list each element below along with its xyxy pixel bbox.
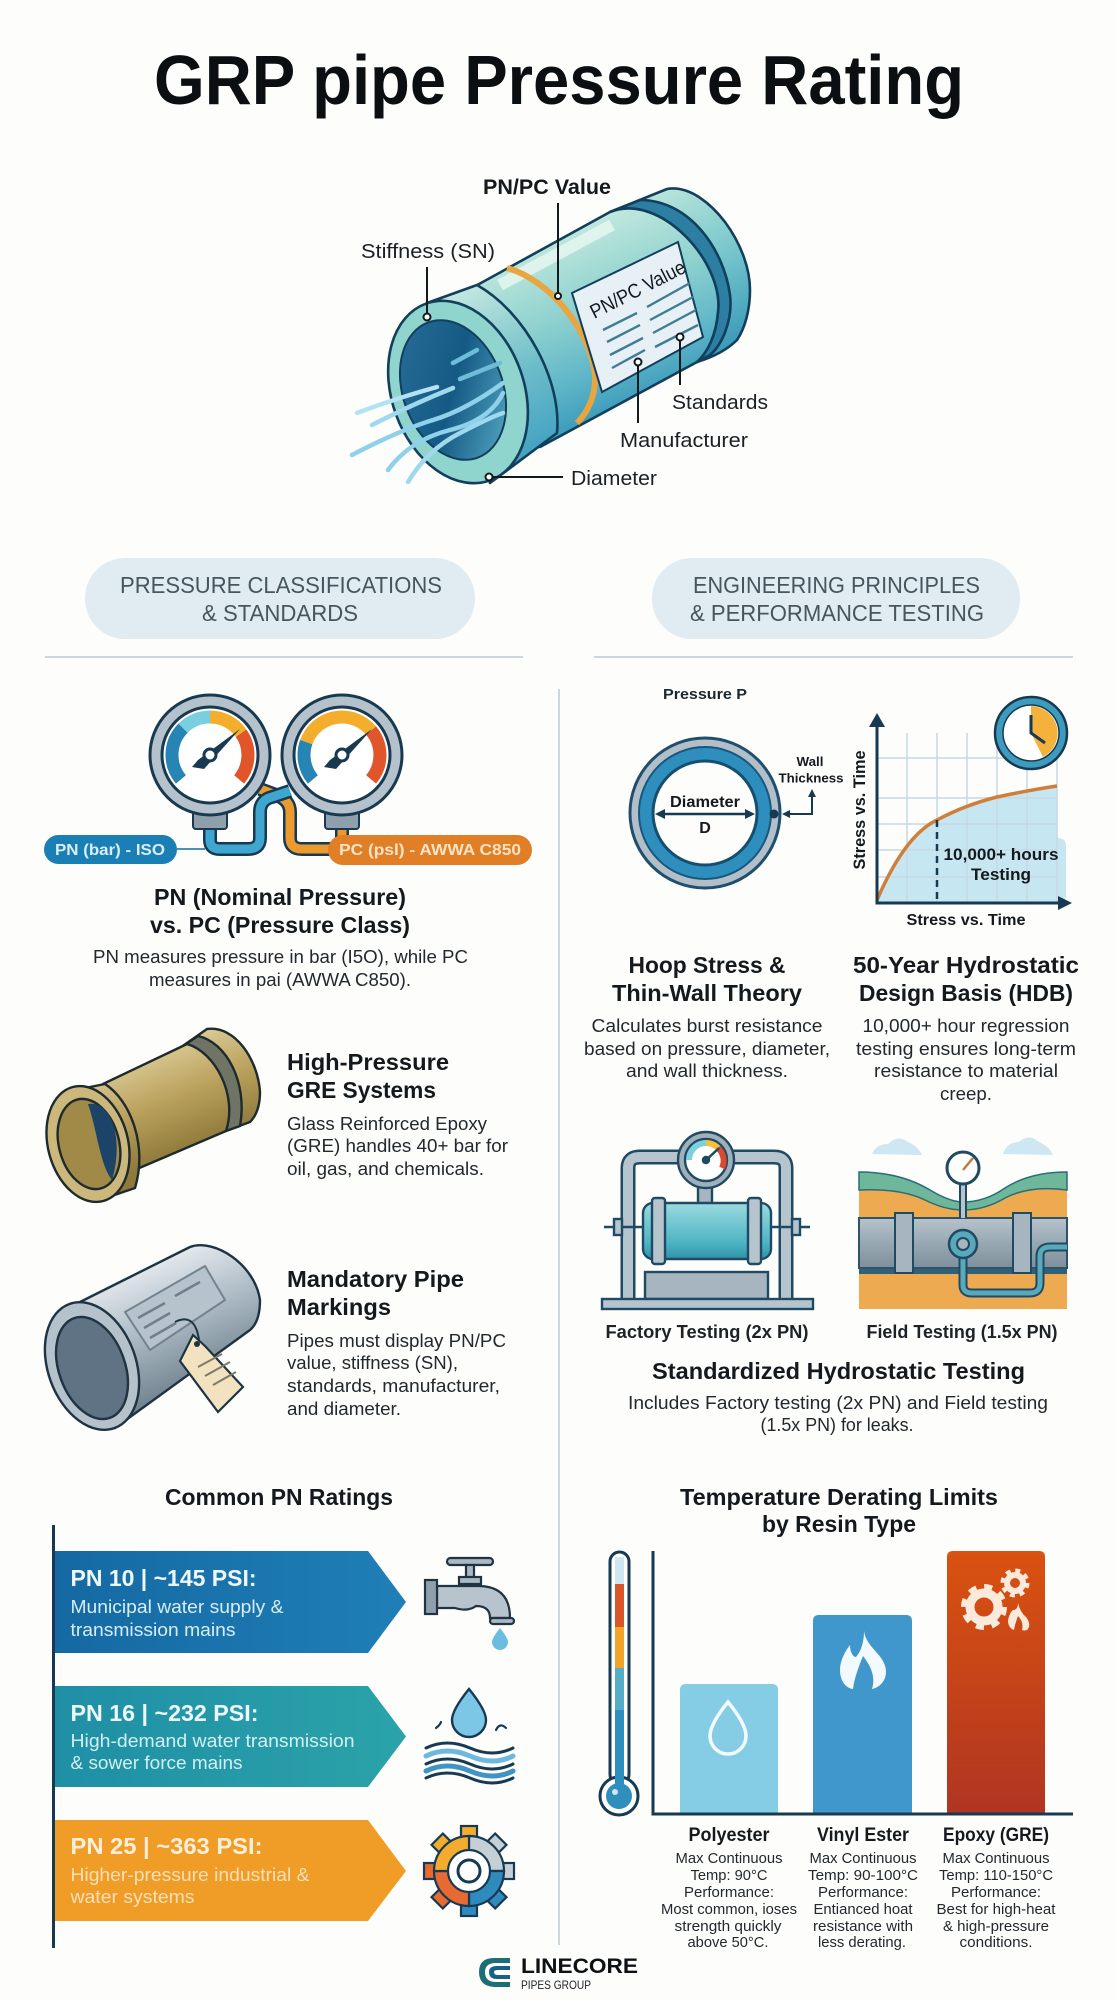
logo: Linecore Pipes Group: PIPES GROUP [521, 1978, 591, 1992]
data label on pipe: PN/PC Value [587, 257, 689, 323]
column text: polyester: strength quickly [674, 1919, 782, 1935]
arrow: PN 16: & sower force mains [70, 1753, 242, 1773]
heading: GRE: High-Pressure [287, 1049, 449, 1075]
text: GRE description: Glass Reinforced Epoxy [287, 1114, 487, 1134]
heading: hoop stress [612, 952, 802, 1006]
column text: vinyl ester: Vinyl Ester [817, 1825, 910, 1846]
arrow: PN 10 [55, 1551, 406, 1653]
text: PN vs PC description: PN measures pressure in bar (I5O), while PC [93, 947, 468, 967]
text: markings description: Pipes must display PN/PC [287, 1331, 506, 1351]
heading: HDB: 50-Year Hydrostatic [853, 952, 1079, 978]
gauge: PC [282, 695, 402, 829]
bar: epoxy [947, 1551, 1045, 1813]
column text: polyester [661, 1825, 797, 1951]
column text: vinyl ester: Temp: 90-100°C [808, 1868, 918, 1884]
captions: test types: Field Testing (1.5x PN) [866, 1322, 1058, 1342]
heading: GRE [287, 1049, 449, 1103]
chart: stress vs time: Stress vs. Time [906, 912, 1026, 929]
callout labels: Manufacturer [620, 430, 748, 452]
text: HDB description [856, 1016, 1076, 1104]
text: markings description [287, 1331, 506, 1419]
heading: common PN ratings: Common PN Ratings [165, 1484, 393, 1510]
section header: pressure classifications: & STANDARDS [202, 600, 358, 626]
column text: polyester: Temp: 90°C [690, 1868, 768, 1884]
pipe body [364, 188, 750, 503]
logo: Linecore Pipes Group [479, 1955, 638, 1992]
diagram: hoop stress ring [630, 686, 844, 888]
diagram: hoop stress ring: Thickness [778, 770, 844, 786]
diagram: hoop stress ring: Pressure P [663, 686, 747, 703]
panel: PN vs PC gauges [44, 695, 532, 865]
column text: polyester: Most common, ioses [661, 1902, 797, 1918]
section header: pressure classifications [85, 558, 475, 639]
text: standardized testing description: (1.5x PN) for leaks. [760, 1415, 914, 1435]
arrow: PN 10: transmission mains [70, 1620, 236, 1640]
section header: engineering principles: & PERFORMANCE TESTING [690, 600, 984, 626]
text: PN vs PC description: measures in pai (AWWA C850). [149, 970, 411, 990]
callout labels: Standards [672, 392, 768, 414]
callouts [424, 203, 684, 480]
text: markings description: and diameter. [287, 1399, 401, 1419]
gauge: PN [150, 695, 270, 829]
data label on pipe [572, 242, 703, 392]
text: markings description: value, stiffness (SN), [287, 1353, 458, 1373]
title: GRP pipe Pressure Rating [154, 41, 964, 119]
column text: epoxy: Temp: 110-150°C [939, 1868, 1053, 1884]
section header: engineering principles: ENGINEERING PRINCIPLES [693, 572, 980, 598]
pill: PC psi [328, 835, 532, 865]
text: HDB description: resistance to material [874, 1061, 1058, 1081]
column text: polyester: Polyester [688, 1825, 770, 1846]
arrow: PN 16: PN 16 | ~232 PSI: [70, 1700, 258, 1726]
column text: polyester: Performance: [684, 1885, 774, 1901]
gauge on rig [678, 1132, 734, 1188]
heading: hoop stress: Hoop Stress & [628, 952, 786, 978]
heading: standardized testing: Standardized Hydrostatic Testing [652, 1358, 1025, 1384]
text: hoop stress description: and wall thickness. [626, 1061, 788, 1081]
chart: stress vs time: 10,000+ hours [944, 846, 1058, 864]
column text: epoxy: Max Continuous [942, 1851, 1050, 1867]
text: markings description: standards, manufacturer, [287, 1376, 500, 1396]
text: hoop stress description [584, 1016, 830, 1081]
hero illustration: labelled pipe [352, 176, 768, 503]
section header: engineering principles [652, 558, 1020, 639]
column text: epoxy: Epoxy (GRE) [943, 1825, 1049, 1846]
bar: polyester [680, 1684, 778, 1813]
text: hoop stress description: Calculates burst resistance [592, 1016, 822, 1036]
heading: temperature derating [680, 1484, 998, 1537]
heading: markings: Markings [287, 1294, 391, 1320]
heading: HDB: Design Basis (HDB) [859, 980, 1073, 1006]
column text: epoxy: conditions. [960, 1935, 1032, 1951]
diagram: hoop stress ring: D [699, 820, 711, 837]
column text: epoxy [936, 1825, 1056, 1951]
callout labels: Stiffness (SN) [361, 241, 495, 263]
text: HDB description: creep. [940, 1084, 992, 1104]
arrow: PN 25 [55, 1820, 406, 1921]
icon: clock [995, 697, 1067, 769]
column text: polyester: Max Continuous [676, 1851, 782, 1867]
captions: test types: Factory Testing (2x PN) [606, 1322, 808, 1342]
text: HDB description: testing ensures long-term [856, 1039, 1076, 1059]
callout labels: Diameter [571, 468, 657, 490]
heading: hoop stress: Thin-Wall Theory [612, 980, 802, 1006]
illustration: field test buried pipe [859, 1138, 1067, 1309]
arrow: PN 25: Higher-pressure industrial & [70, 1865, 310, 1885]
heading: markings [287, 1266, 464, 1320]
column text: epoxy: Best for high-heat [936, 1902, 1056, 1918]
arrow: PN 25: water systems [69, 1887, 194, 1907]
arrow: PN 25: PN 25 | ~363 PSI: [70, 1833, 262, 1859]
text: hoop stress description: based on pressure, diameter, [584, 1039, 830, 1059]
text: GRE description: oil, gas, and chemicals. [287, 1159, 484, 1179]
callout labels: PN/PC Value [483, 176, 611, 199]
bar: vinyl ester [813, 1615, 912, 1813]
callout labels [361, 176, 768, 490]
column text: epoxy: & high-pressure [943, 1919, 1049, 1935]
pill: PC psi: PC (psl) - AWWA C850 [339, 842, 521, 859]
text: GRE description: (GRE) handles 40+ bar for [287, 1136, 508, 1156]
column text: vinyl ester: Entianced hoat [814, 1902, 912, 1918]
icon: GRE pipe [34, 1029, 260, 1211]
column text: vinyl ester: Performance: [818, 1885, 908, 1901]
text: GRE description [287, 1114, 508, 1179]
heading: markings: Mandatory Pipe [287, 1266, 464, 1292]
icon: water drop and waves [426, 1689, 513, 1783]
pill: PN bar: PN (bar) - ISO [55, 842, 165, 859]
diagram: hoop stress ring: Wall [796, 754, 824, 769]
chart: stress vs time: Testing [971, 866, 1031, 884]
chart: stress vs time [850, 697, 1072, 929]
section header: pressure classifications: PRESSURE CLASSIFICATIONS [120, 572, 442, 598]
captions: test types [606, 1322, 1058, 1342]
logo: Linecore Pipes Group: LINECORE [521, 1955, 638, 1978]
icon: faucet [425, 1558, 514, 1650]
pipes between gauges [177, 789, 342, 849]
column text: vinyl ester [808, 1825, 918, 1951]
text: standardized testing description [628, 1393, 1048, 1435]
heading: GRE: GRE Systems [287, 1077, 436, 1103]
column text: vinyl ester: Max Continuous [810, 1851, 916, 1867]
arrow: PN 10: Municipal water supply & [70, 1597, 284, 1617]
icon: gear [424, 1826, 514, 1916]
arrow: PN 10: PN 10 | ~145 PSI: [70, 1565, 256, 1591]
arrow: PN 16 [55, 1686, 406, 1787]
illustration: factory test rig [602, 1132, 813, 1309]
heading: temperature derating: by Resin Type [762, 1511, 916, 1537]
bar chart: resin temperature limits [653, 1551, 1073, 1814]
pill: PN bar [44, 835, 177, 864]
heading: PN vs PC: PN (Nominal Pressure) [154, 884, 406, 910]
icon: thermometer [600, 1552, 638, 1815]
icon: marked steel pipe with tag [28, 1245, 260, 1443]
heading: PN vs PC [150, 884, 410, 938]
arrow: PN 16: High-demand water transmission [70, 1731, 354, 1751]
water streams [352, 350, 503, 482]
heading: PN vs PC: vs. PC (Pressure Class) [150, 912, 410, 938]
text: HDB description: 10,000+ hour regression [862, 1016, 1070, 1036]
chart: stress vs time: Stress vs. Time [850, 750, 869, 870]
column text: epoxy: Performance: [951, 1885, 1041, 1901]
diagram: hoop stress ring: Diameter [670, 794, 740, 811]
heading: temperature derating: Temperature Derating Limits [680, 1484, 998, 1510]
text: standardized testing description: Includes Factory testing (2x PN) and Field testing [628, 1393, 1048, 1413]
column text: vinyl ester: less derating. [818, 1935, 906, 1951]
column text: vinyl ester: resistance with [813, 1919, 913, 1935]
heading: HDB [853, 952, 1079, 1006]
text: PN vs PC description [93, 947, 468, 990]
column text: polyester: above 50°C. [688, 1935, 768, 1951]
